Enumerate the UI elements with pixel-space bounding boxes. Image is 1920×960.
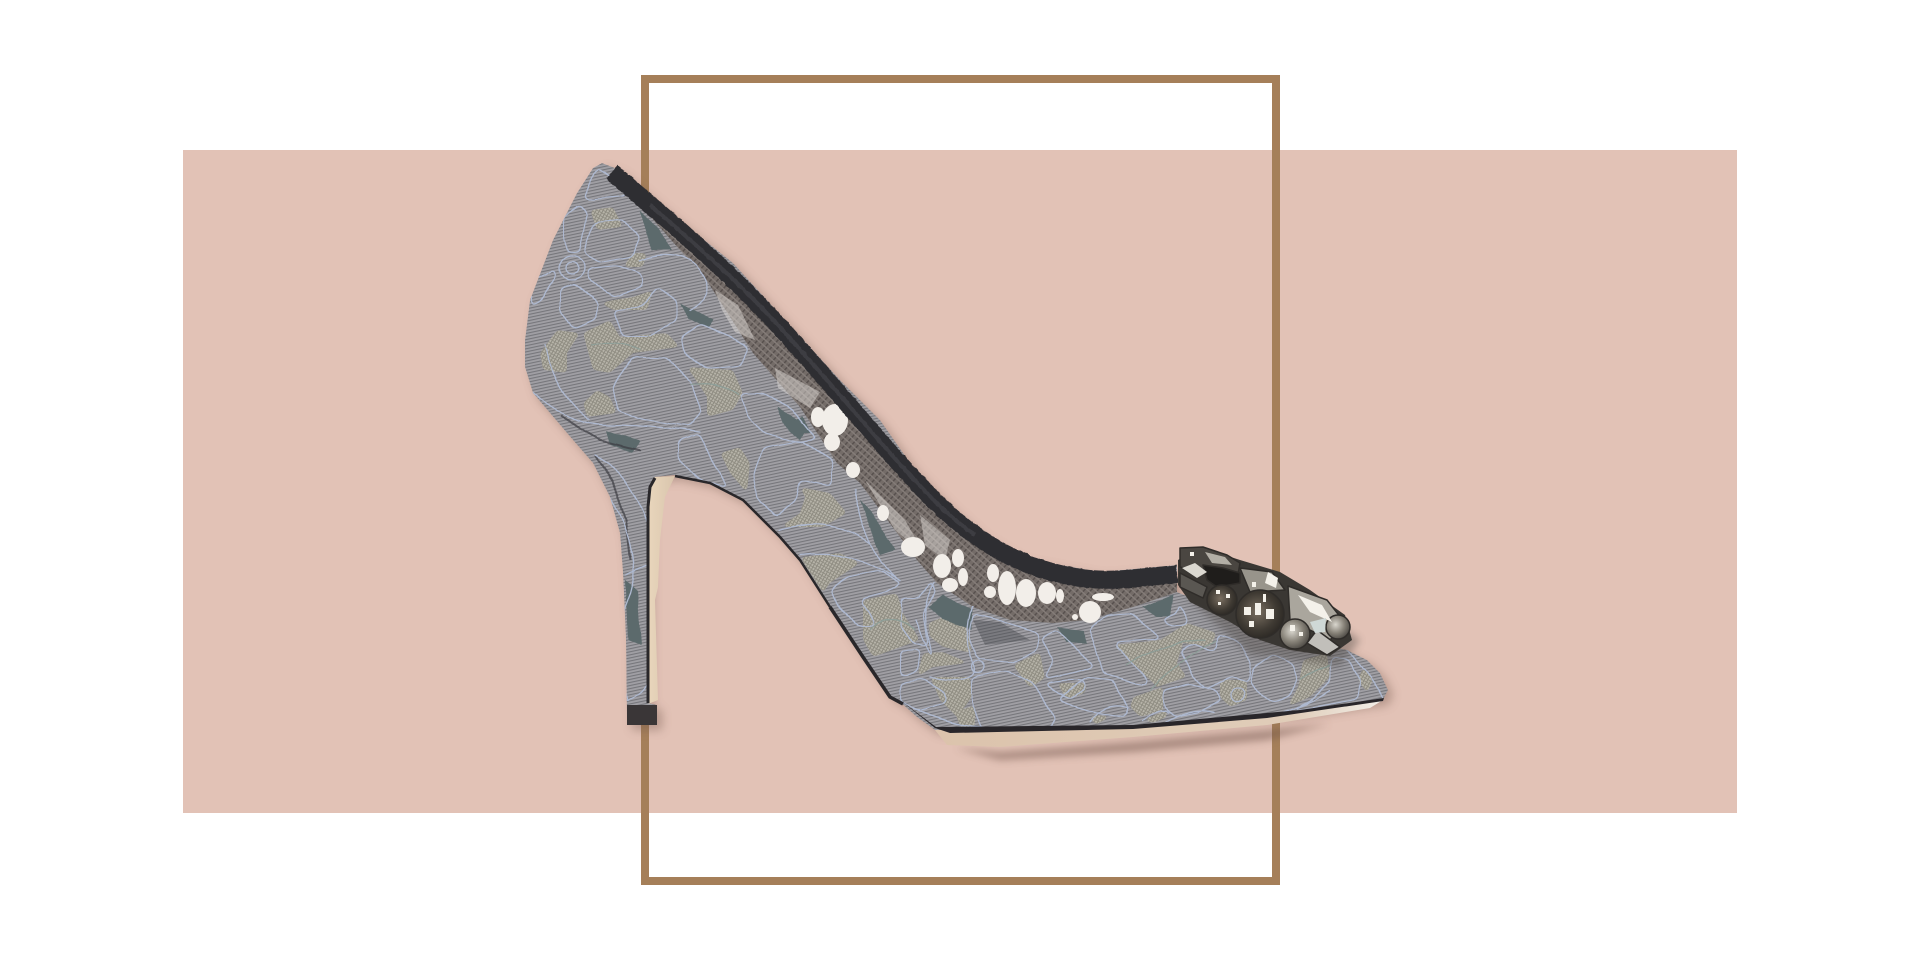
white gaps in net bbox=[811, 404, 1114, 623]
lace base bbox=[525, 163, 1388, 730]
lace petal outlines bbox=[530, 167, 1383, 730]
crystal brooch bbox=[1178, 547, 1360, 666]
black topline piping bbox=[612, 172, 1177, 580]
cast shadow bbox=[530, 168, 1393, 760]
brooch shadow bbox=[1190, 560, 1360, 666]
sheer net band behind topline bbox=[633, 193, 1177, 623]
arch and heel edge bbox=[648, 476, 1384, 733]
dark hatched openwork bbox=[973, 620, 1030, 645]
tan square frame bbox=[645, 79, 1276, 881]
lace upper bbox=[525, 163, 1388, 730]
heel tip bbox=[627, 705, 657, 725]
product composition bbox=[183, 75, 1737, 885]
insole visible behind heel bbox=[648, 476, 675, 704]
sheer mesh openings in lace bbox=[540, 207, 1373, 727]
pink background band bbox=[183, 150, 1737, 813]
dark teal lining patches bbox=[606, 210, 1173, 645]
green-grey veins across mesh bbox=[590, 343, 1330, 690]
sparkle highlights bbox=[1182, 552, 1332, 636]
shoe: grey lace pump bbox=[525, 163, 1393, 760]
dark seam shading at heel neck bbox=[560, 415, 640, 560]
sole bbox=[935, 700, 1383, 747]
brooch base bbox=[1178, 547, 1352, 656]
crystals bbox=[1180, 547, 1350, 655]
pale net patches bbox=[715, 290, 950, 560]
